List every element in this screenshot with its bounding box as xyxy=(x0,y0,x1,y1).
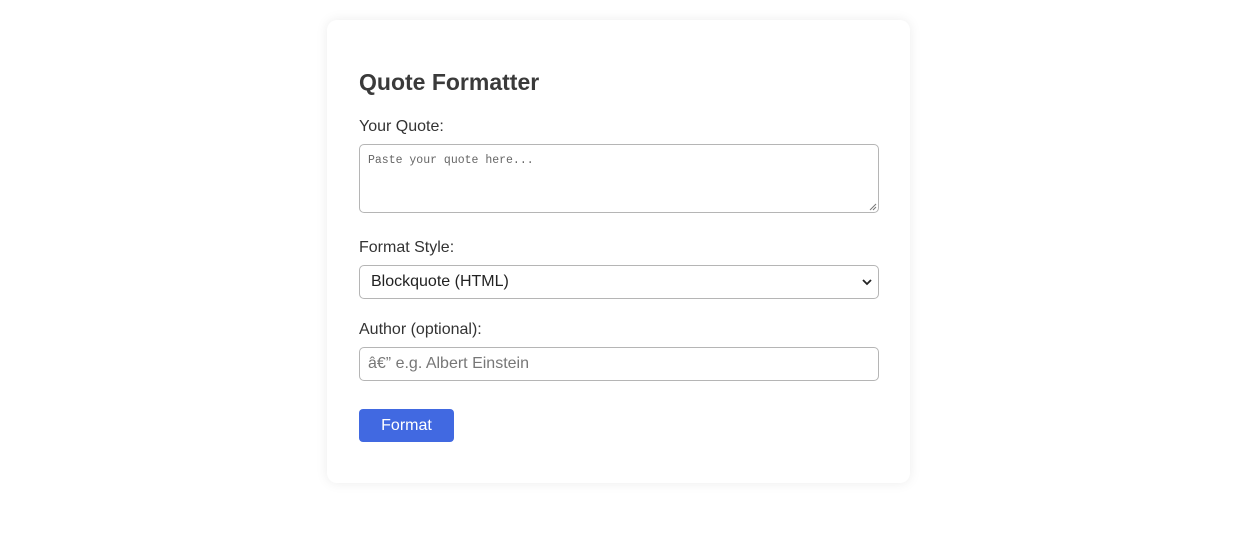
title: Quote Formatter xyxy=(359,69,539,95)
label: author: Author (optional): xyxy=(359,321,482,338)
select: format style: Blockquote (HTML) xyxy=(371,273,509,290)
select: format style xyxy=(359,265,879,299)
button: format xyxy=(359,409,454,442)
textarea: quote: Paste your quote here... xyxy=(368,154,534,167)
label: format style: Format Style: xyxy=(359,239,454,256)
button: format: Format xyxy=(381,417,432,434)
panel: form card xyxy=(327,20,910,483)
label: your quote: Your Quote: xyxy=(359,118,444,135)
input: author xyxy=(359,347,879,381)
textarea: quote xyxy=(359,144,879,213)
input: author: â€” e.g. Albert Einstein xyxy=(368,355,529,372)
